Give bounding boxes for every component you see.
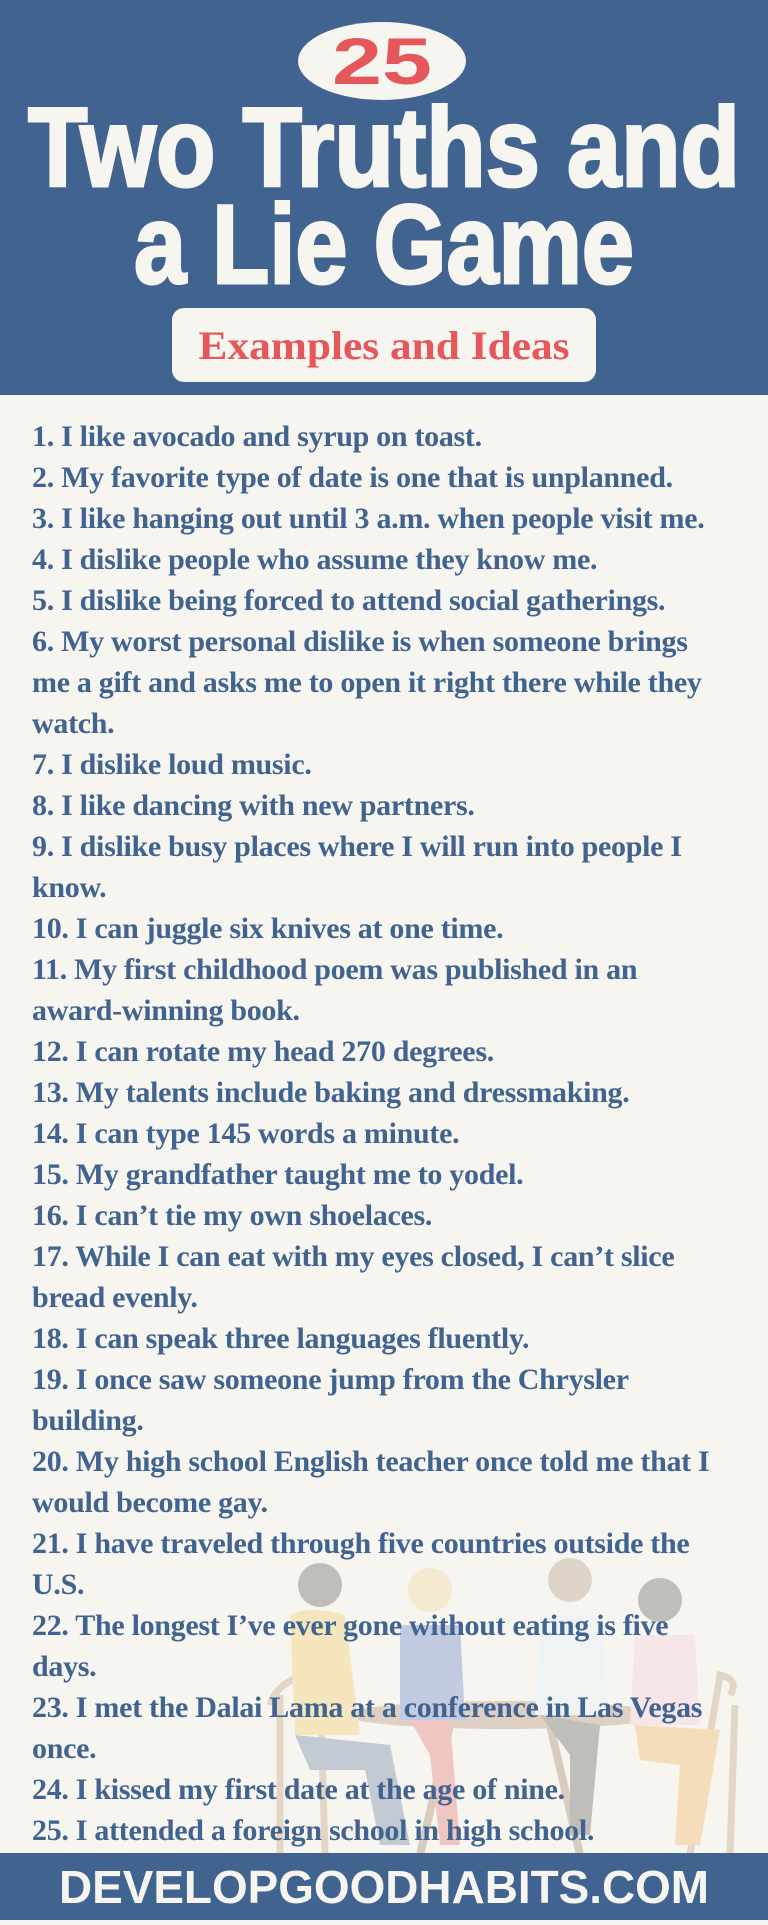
- list of 25 examples: 8. I like dancing with new partners.: [32, 789, 475, 822]
- list of 25 examples: 23. I met the Dalai Lama at a conference in Las Vegas: [32, 1691, 702, 1724]
- list of 25 examples: 9. I dislike busy places where I will run into people I: [32, 830, 682, 863]
- list of 25 examples: watch.: [32, 707, 114, 740]
- list of 25 examples: 18. I can speak three languages fluently.: [32, 1322, 529, 1355]
- list of 25 examples: 12. I can rotate my head 270 degrees.: [32, 1035, 494, 1068]
- list of 25 examples: know.: [32, 871, 106, 904]
- badge: 25: [298, 22, 466, 100]
- list of 25 examples: 6. My worst personal dislike is when someone brings: [32, 625, 688, 658]
- list of 25 examples: 11. My first childhood poem was published in an: [32, 953, 637, 986]
- subtitle pill: Examples and Ideas: [198, 323, 570, 368]
- list of 25 examples: days.: [32, 1650, 96, 1683]
- list of 25 examples: [32, 420, 709, 1847]
- footer band: [0, 1853, 768, 1920]
- list of 25 examples: 20. My high school English teacher once told me that I: [32, 1445, 709, 1478]
- list of 25 examples: 10. I can juggle six knives at one time.: [32, 912, 503, 945]
- list of 25 examples: 3. I like hanging out until 3 a.m. when people visit me.: [32, 502, 704, 535]
- list of 25 examples: 25. I attended a foreign school in high school.: [32, 1814, 594, 1847]
- list of 25 examples: U.S.: [32, 1568, 84, 1601]
- list of 25 examples: 2. My favorite type of date is one that is unplanned.: [32, 461, 673, 494]
- illustration: people at a table: [266, 1558, 738, 1853]
- list of 25 examples: 13. My talents include baking and dressmaking.: [32, 1076, 629, 1109]
- list of 25 examples: 14. I can type 145 words a minute.: [32, 1117, 459, 1150]
- list of 25 examples: 4. I dislike people who assume they know me.: [32, 543, 597, 576]
- list of 25 examples: 24. I kissed my first date at the age of nine.: [32, 1773, 565, 1806]
- list of 25 examples: award-winning book.: [32, 994, 300, 1027]
- list of 25 examples: 16. I can’t tie my own shoelaces.: [32, 1199, 432, 1232]
- list of 25 examples: 21. I have traveled through five countries outside the: [32, 1527, 689, 1560]
- subtitle pill: [172, 308, 596, 382]
- footer url: DEVELOPGOODHABITS.COM: [59, 1861, 709, 1913]
- list of 25 examples: 15. My grandfather taught me to yodel.: [32, 1158, 523, 1191]
- list of 25 examples: bread evenly.: [32, 1281, 198, 1314]
- list of 25 examples: 7. I dislike loud music.: [32, 748, 312, 781]
- list of 25 examples: would become gay.: [32, 1486, 268, 1519]
- list of 25 examples: 19. I once saw someone jump from the Chrysler: [32, 1363, 629, 1396]
- badge: 25: 25: [332, 24, 432, 98]
- title: [28, 85, 740, 307]
- header band: [0, 0, 768, 395]
- list of 25 examples: me a gift and asks me to open it right there while they: [32, 666, 702, 699]
- list of 25 examples: building.: [32, 1404, 144, 1437]
- list of 25 examples: 1. I like avocado and syrup on toast.: [32, 420, 482, 453]
- list of 25 examples: 22. The longest I’ve ever gone without eating is five: [32, 1609, 668, 1642]
- list of 25 examples: once.: [32, 1732, 96, 1765]
- list of 25 examples: 5. I dislike being forced to attend social gatherings.: [32, 584, 665, 617]
- list of 25 examples: 17. While I can eat with my eyes closed, I can’t slice: [32, 1240, 674, 1273]
- title: a Lie Game: [134, 182, 634, 307]
